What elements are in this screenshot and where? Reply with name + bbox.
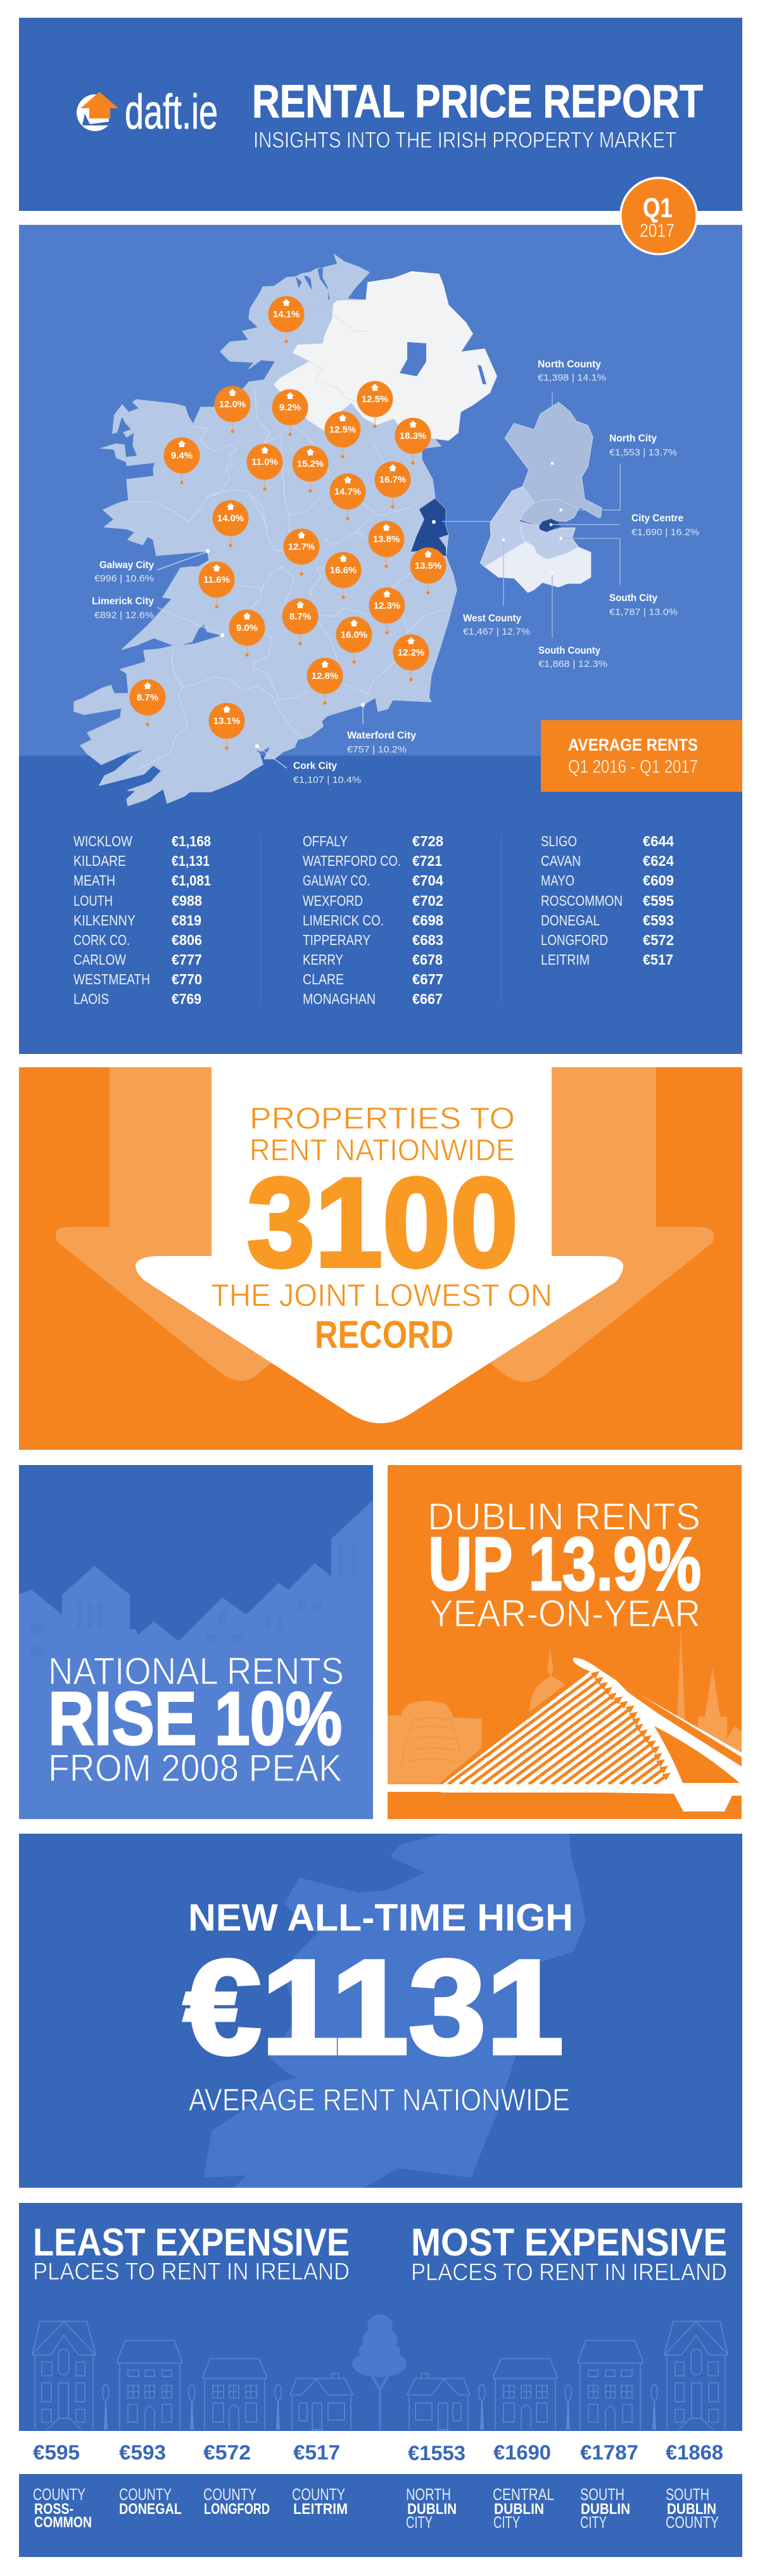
place labels: SOUTH [666, 2485, 709, 2504]
column 1: LAOIS [73, 991, 109, 1007]
Dublin labels: North County [538, 359, 601, 370]
column 2 [303, 833, 443, 1007]
Dublin labels: €1,553 | 13.7% [609, 447, 677, 458]
column 3: SLIGO [541, 833, 577, 849]
callout: average rents [541, 720, 742, 792]
callout: average rents: AVERAGE RENTS [568, 735, 698, 754]
text: year-on-year: YEAR-ON-YEAR [429, 1592, 700, 1635]
county percentage pins [129, 296, 446, 750]
prices row: €1787 [580, 2441, 638, 2464]
panel: map [19, 225, 742, 1054]
column 2: €728 [412, 833, 443, 849]
column 3: €517 [643, 951, 673, 968]
text: up 13.9%: UP 13.9% [428, 1522, 701, 1606]
column 2: TIPPERARY [303, 932, 370, 948]
caption: AVERAGE RENT NATIONWIDE [189, 2083, 570, 2117]
north city [521, 499, 578, 526]
panel: new all-time high [19, 1830, 742, 2192]
west county [480, 486, 534, 567]
column 2: €698 [412, 912, 443, 929]
place labels: SOUTH [580, 2485, 624, 2504]
column 3 [541, 833, 674, 968]
column 1: WICKLOW [73, 833, 132, 849]
county percentage pins: 9.4% [171, 450, 193, 461]
prices row: €572 [203, 2441, 251, 2464]
Dublin labels [463, 359, 699, 669]
column 1: €819 [172, 912, 201, 929]
prices row: €517 [293, 2441, 340, 2464]
place labels: CITY [406, 2513, 433, 2532]
prices row: €1868 [666, 2441, 723, 2464]
Dublin skyline silhouette [388, 1627, 742, 1784]
Dublin labels: €1,690 | 16.2% [631, 527, 699, 538]
column 1: WESTMEATH [73, 971, 150, 987]
column 3: CAVAN [541, 853, 581, 869]
column 2: €677 [412, 971, 443, 987]
column 3: MAYO [541, 872, 574, 889]
place labels: ROSS- [34, 2501, 73, 2518]
county percentage pins: 12.2% [398, 647, 424, 658]
icon: tree [352, 2314, 407, 2430]
place labels: CENTRAL [493, 2485, 554, 2504]
column 1: KILKENNY [73, 912, 136, 929]
Dublin labels: €1,467 | 12.7% [463, 626, 530, 637]
big number: €1131 [184, 1932, 564, 2082]
heading: NEW ALL-TIME HIGH [188, 1896, 573, 1939]
logo: daft.ie: daft.ie [125, 85, 218, 139]
city callouts: Galway City [99, 560, 154, 571]
text: rise 10%: RISE 10% [48, 1677, 342, 1761]
county percentage pins: 16.7% [379, 474, 406, 485]
county percentage pins: 14.7% [334, 486, 361, 497]
place labels: COUNTY [666, 2513, 719, 2532]
county percentage pins: 18.3% [400, 431, 426, 441]
place labels: DONEGAL [119, 2501, 182, 2518]
county percentage pins: 8.7% [137, 692, 158, 703]
column 1: MEATH [73, 872, 115, 889]
county percentage pins: 12.8% [312, 671, 338, 682]
place labels: CITY [493, 2513, 520, 2532]
map of Ireland [74, 255, 497, 806]
place labels: NORTH [406, 2485, 451, 2504]
column 3: €609 [643, 872, 674, 889]
Dublin labels: €1,787 | 13.0% [609, 607, 678, 618]
panel: Dublin rents [388, 1465, 742, 1819]
place labels: LONGFORD [204, 2501, 270, 2518]
text: properties to rent nationwide: RENT NATIONWIDE [250, 1134, 515, 1167]
column 1: CARLOW [73, 951, 126, 968]
county percentage pins: 12.5% [362, 394, 388, 405]
Dublin highlight [411, 498, 448, 556]
county percentage pins: 12.3% [374, 600, 400, 611]
map silhouette [206, 1830, 584, 2192]
column 3: ROSCOMMON [541, 892, 623, 909]
county percentage pins: 15.2% [297, 459, 324, 469]
column 1 [73, 833, 211, 1007]
city centre [540, 519, 567, 532]
Dublin inset map [442, 393, 620, 638]
prices row: €595 [33, 2441, 80, 2464]
column 2: MONAGHAN [303, 991, 376, 1007]
text: national rents: NATIONAL RENTS [48, 1650, 344, 1692]
column 2: €721 [412, 853, 442, 869]
column 1: €1,131 [172, 853, 210, 869]
column 2: GALWAY CO. [303, 872, 370, 889]
column 2: WEXFORD [303, 892, 363, 909]
column 3: LONGFORD [541, 932, 608, 948]
column 3: DONEGAL [541, 912, 600, 929]
heading: least expensive: LEAST EXPENSIVE [33, 2221, 350, 2264]
county percentage pins: 11.6% [203, 574, 230, 585]
county rents table [73, 833, 674, 1007]
city callouts: Cork City [293, 761, 337, 771]
prices row: €593 [119, 2441, 166, 2464]
city callouts: Limerick City [92, 596, 154, 607]
column 2: KERRY [303, 951, 343, 968]
column 3: LEITRIM [541, 951, 590, 968]
place labels: DUBLIN [494, 2501, 544, 2518]
place labels: COUNTY [119, 2485, 172, 2504]
column 1: €769 [172, 991, 201, 1007]
column 1: €806 [172, 932, 202, 948]
street of houses: right [407, 2321, 728, 2430]
prices row: €1553 [408, 2442, 466, 2465]
county percentage pins: 14.0% [217, 513, 244, 524]
city callouts: €892 | 12.6% [94, 610, 154, 621]
Dublin labels: €1,398 | 14.1% [538, 372, 606, 383]
callout: average rents: Q1 2016 - Q1 2017 [568, 757, 698, 777]
column 2: €683 [412, 932, 443, 948]
subtitle: INSIGHTS INTO THE IRISH PROPERTY MARKET [253, 128, 676, 153]
text: record: RECORD [315, 1313, 453, 1356]
column 1: LOUTH [73, 892, 113, 909]
place labels: COUNTY [292, 2485, 345, 2504]
place labels: COUNTY [33, 2485, 86, 2504]
panel: national rents [19, 1465, 373, 1819]
panel: properties to rent [19, 1067, 742, 1450]
place labels: DUBLIN [581, 2501, 630, 2518]
icon: light arrow [56, 1067, 714, 1382]
county percentage pins: 12.7% [288, 542, 315, 552]
county percentage pins: 12.5% [329, 424, 356, 435]
south county [484, 542, 591, 593]
text: dublin rents: DUBLIN RENTS [428, 1495, 700, 1538]
heading: least expensive: PLACES TO RENT IN IRELAND [33, 2259, 350, 2285]
heading: least expensive [33, 2221, 350, 2285]
south city [521, 522, 578, 559]
column 2: LIMERICK CO. [303, 912, 384, 929]
city callouts: €757 | 10.2% [347, 744, 407, 755]
column 2: WATERFORD CO. [303, 853, 401, 869]
column 2: CLARE [303, 971, 344, 987]
column 3: €572 [643, 932, 674, 948]
badge: Q1 2017 [619, 177, 698, 255]
Samuel Beckett bridge [388, 1658, 742, 1811]
county percentage pins: 9.2% [279, 402, 301, 413]
heading: most expensive [411, 2221, 727, 2286]
north county [505, 402, 602, 517]
column 1: €770 [172, 971, 202, 987]
column 1: CORK CO. [73, 932, 130, 948]
place labels: CITY [580, 2513, 607, 2532]
column 1: €988 [172, 892, 202, 909]
column 3: €644 [643, 833, 674, 849]
logo: daft.ie [77, 85, 218, 139]
place labels [33, 2485, 719, 2532]
column 2: €678 [412, 951, 443, 968]
place labels: COMMON [34, 2514, 92, 2531]
county percentage pins: 12.0% [219, 399, 246, 410]
header panel [19, 18, 742, 211]
column 1: KILDARE [73, 853, 126, 869]
city callouts: €1,107 | 10.4% [293, 775, 361, 785]
Dublin labels: North City [609, 433, 657, 444]
Dublin labels: South County [538, 645, 600, 656]
text: joint lowest: THE JOINT LOWEST ON [211, 1278, 552, 1313]
badge: Q1 2017: Q1 [643, 193, 673, 224]
place labels: DUBLIN [667, 2501, 716, 2518]
column 3: €593 [643, 912, 674, 929]
column 1: €1,168 [172, 833, 211, 849]
county percentage pins: 8.7% [289, 611, 311, 622]
Dublin labels: €1,868 | 12.3% [538, 659, 607, 669]
place labels: LEITRIM [293, 2501, 348, 2518]
city callouts [92, 549, 416, 785]
text: properties to rent nationwide [250, 1102, 515, 1167]
county percentage pins: 13.8% [373, 534, 400, 545]
Dublin labels: West County [463, 613, 521, 624]
icon: white arrow [136, 1067, 623, 1423]
county percentage pins: 13.5% [415, 561, 441, 571]
street of houses: left [32, 2321, 353, 2430]
badge: Q1 2017: 2017 [640, 220, 674, 241]
panel: least and most expensive [19, 2203, 742, 2557]
column 1: €777 [172, 951, 202, 968]
heading: most expensive: MOST EXPENSIVE [411, 2221, 727, 2264]
county percentage pins: 16.0% [341, 630, 367, 640]
Dublin labels: South City [609, 593, 657, 604]
county percentage pins: 14.1% [273, 309, 300, 320]
loughs [400, 342, 486, 384]
Northern Ireland [274, 272, 497, 440]
prices row: €1690 [493, 2441, 551, 2464]
Dublin labels: City Centre [631, 513, 683, 524]
heading: most expensive: PLACES TO RENT IN IRELAND [411, 2259, 727, 2286]
skyline [19, 1501, 373, 1819]
prices row [33, 2441, 723, 2465]
county percentage pins: 11.0% [251, 457, 278, 467]
place labels: DUBLIN [407, 2501, 457, 2518]
text: from 2008 peak: FROM 2008 PEAK [48, 1747, 342, 1789]
county percentage pins: 9.0% [236, 623, 258, 633]
text: properties to rent nationwide: PROPERTIES TO [250, 1102, 515, 1136]
county percentage pins: 13.1% [213, 716, 240, 726]
big number 3100: 3100 [247, 1152, 518, 1293]
column 3: €595 [643, 892, 674, 909]
column 2: OFFALY [303, 833, 348, 849]
place labels: COUNTY [203, 2485, 256, 2504]
column 2: €704 [412, 872, 443, 889]
column 1: €1,081 [172, 872, 211, 889]
city callouts: Waterford City [347, 730, 416, 741]
column 2: €667 [412, 991, 443, 1007]
column 3: €624 [643, 853, 674, 869]
county percentage pins: 16.6% [330, 565, 357, 576]
column 2: €702 [412, 892, 443, 909]
city callouts: €996 | 10.6% [94, 573, 154, 584]
